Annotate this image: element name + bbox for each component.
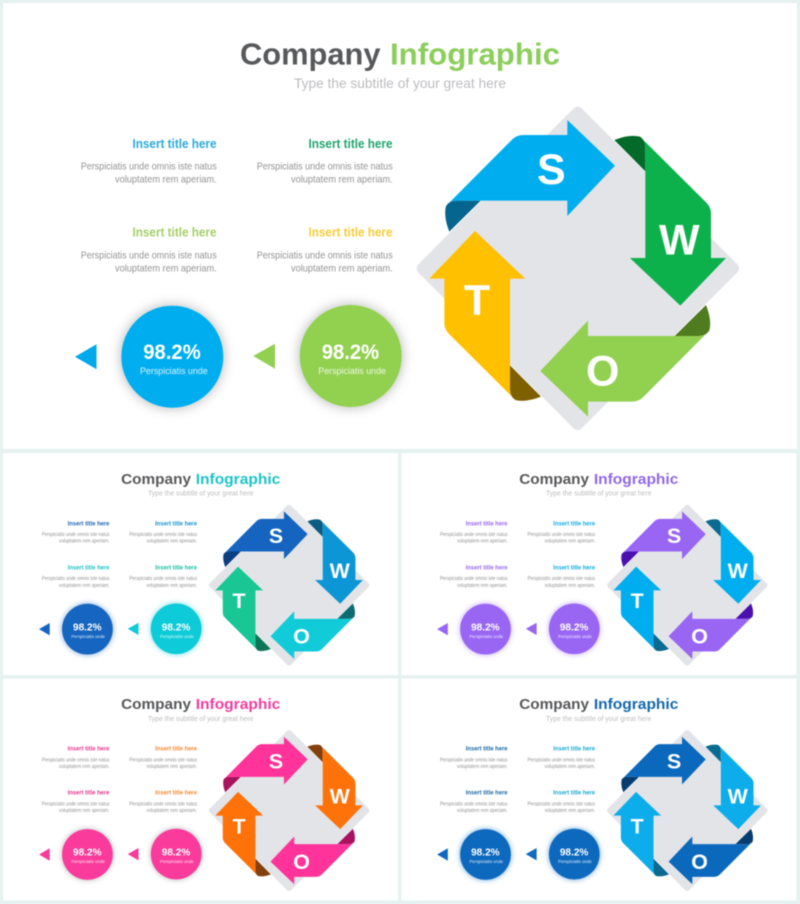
text block: O: Insert title here bbox=[466, 564, 508, 571]
arrow S: S bbox=[269, 524, 283, 548]
icon: left triangle bbox=[437, 848, 448, 861]
text block: O bbox=[81, 226, 217, 274]
text block: T: voluptatem rem aperiam. bbox=[146, 583, 197, 589]
arrow W: W bbox=[728, 785, 749, 809]
text block: O: voluptatem rem aperiam. bbox=[115, 262, 217, 274]
text block: O: Perspiciatis unde omnis iste natus bbox=[81, 249, 217, 261]
text block: S: voluptatem rem aperiam. bbox=[457, 538, 508, 544]
text block: W: Insert title here bbox=[308, 137, 393, 151]
text block: S bbox=[81, 137, 217, 186]
title: Infographic bbox=[390, 38, 560, 72]
stat circle: Perspiciatis unde bbox=[160, 634, 194, 640]
subtitle: Type the subtitle of your great here bbox=[294, 75, 506, 91]
text block: O: Insert title here bbox=[68, 564, 110, 571]
title: Company bbox=[519, 696, 590, 713]
text block: O: voluptatem rem aperiam. bbox=[457, 808, 508, 814]
arrow S: S bbox=[667, 524, 681, 548]
stat circle: 98.2% bbox=[162, 848, 190, 859]
arrow T: T bbox=[631, 589, 644, 613]
text block: W: Insert title here bbox=[553, 746, 596, 753]
text block: W: Perspiciatis unde omnis iste natus bbox=[129, 532, 197, 538]
stat circle bbox=[460, 604, 511, 655]
icon: left triangle bbox=[39, 623, 50, 635]
subtitle: Type the subtitle of your great here bbox=[546, 716, 652, 723]
arrow W bbox=[307, 519, 363, 604]
text block: O bbox=[440, 564, 508, 589]
panel: navy sky variant bbox=[401, 678, 796, 900]
icon: left triangle blue bbox=[75, 344, 96, 369]
text block: O bbox=[42, 790, 110, 814]
text block: T: Perspiciatis unde omnis iste natus bbox=[528, 802, 595, 808]
text block: S: Insert title here bbox=[68, 746, 110, 753]
subtitle: Type the subtitle of your great here bbox=[546, 490, 652, 497]
arrow S: S bbox=[667, 750, 681, 774]
arrow O bbox=[669, 603, 753, 659]
arrow O bbox=[271, 603, 355, 659]
stat circle green: Perspiciatis unde bbox=[318, 366, 386, 377]
stat circle: Perspiciatis unde bbox=[558, 634, 592, 640]
stat circle blue: 98.2% bbox=[143, 341, 201, 364]
arrow O: O bbox=[293, 850, 310, 874]
arrow T bbox=[613, 567, 669, 651]
stat circle blue: Perspiciatis unde bbox=[140, 366, 208, 377]
text block: O: Perspiciatis unde omnis iste natus bbox=[42, 802, 110, 808]
arrow W: W bbox=[330, 559, 351, 583]
text block: W: voluptatem rem aperiam. bbox=[146, 538, 197, 544]
text block: O: Perspiciatis unde omnis iste natus bbox=[42, 576, 110, 582]
text block: T: Perspiciatis unde omnis iste natus bbox=[528, 576, 595, 582]
title: Company bbox=[121, 471, 192, 488]
stat circle bbox=[549, 603, 600, 654]
text block: S: Perspiciatis unde omnis iste natus bbox=[81, 160, 217, 172]
subtitle: Type the subtitle of your great here bbox=[148, 490, 254, 497]
arrow S bbox=[621, 737, 706, 792]
text block: S bbox=[42, 520, 110, 544]
stat circle blue bbox=[121, 306, 223, 408]
arrow T bbox=[215, 792, 271, 876]
text block: T: voluptatem rem aperiam. bbox=[291, 262, 393, 274]
stat circle bbox=[151, 829, 202, 879]
arrow O bbox=[540, 305, 710, 417]
stat circle: 98.2% bbox=[471, 848, 500, 859]
title bbox=[240, 38, 560, 72]
text block: T: Insert title here bbox=[553, 790, 596, 797]
text block: O bbox=[42, 564, 110, 589]
panel: main SWOT infographic bbox=[3, 3, 797, 449]
text block: T: voluptatem rem aperiam. bbox=[545, 583, 595, 589]
panel: pink orange variant bbox=[3, 678, 398, 900]
icon: left triangle bbox=[128, 848, 139, 860]
text block: W: Perspiciatis unde omnis iste natus bbox=[129, 757, 197, 763]
arrow O: O bbox=[293, 625, 310, 649]
arrow W bbox=[705, 519, 761, 604]
stat circle: Perspiciatis unde bbox=[469, 634, 503, 640]
text block: W bbox=[528, 520, 596, 544]
text block: S: Perspiciatis unde omnis iste natus bbox=[440, 757, 508, 763]
title: Company bbox=[121, 696, 192, 713]
text block: T bbox=[129, 564, 197, 589]
arrow W: W bbox=[659, 216, 700, 264]
text block: S: Perspiciatis unde omnis iste natus bbox=[42, 757, 110, 763]
arrow W bbox=[705, 745, 761, 829]
arrow T: T bbox=[631, 814, 644, 838]
title bbox=[519, 696, 678, 713]
SWOT arrow diagram bbox=[422, 112, 733, 424]
text block: T: voluptatem rem aperiam. bbox=[146, 808, 197, 814]
text block: T: Perspiciatis unde omnis iste natus bbox=[129, 576, 197, 582]
stat circle: 98.2% bbox=[471, 622, 500, 633]
stat circle bbox=[62, 604, 113, 655]
text block: O: voluptatem rem aperiam. bbox=[59, 583, 110, 589]
text block: W bbox=[129, 520, 197, 544]
title: Infographic bbox=[594, 471, 678, 488]
icon: left triangle bbox=[526, 848, 537, 860]
stat circle: Perspiciatis unde bbox=[160, 859, 194, 865]
stat circle green: 98.2% bbox=[322, 341, 379, 364]
title: Infographic bbox=[196, 471, 280, 488]
stat circle: Perspiciatis unde bbox=[71, 634, 105, 640]
text block: S: voluptatem rem aperiam. bbox=[59, 764, 110, 770]
panel: teal blue variant bbox=[3, 453, 398, 675]
arrow S bbox=[223, 511, 308, 567]
stat circle: Perspiciatis unde bbox=[469, 859, 503, 865]
text block: W bbox=[129, 746, 197, 770]
stat circle: Perspiciatis unde bbox=[71, 859, 105, 865]
text block: S bbox=[440, 520, 508, 544]
arrow T bbox=[613, 792, 669, 876]
SWOT arrow diagram bbox=[212, 733, 367, 888]
panel: purple variant bbox=[401, 453, 796, 675]
text block: O: Insert title here bbox=[132, 226, 217, 240]
title: Company bbox=[240, 38, 381, 72]
stat circle: 98.2% bbox=[162, 622, 190, 633]
text block: W: voluptatem rem aperiam. bbox=[545, 764, 595, 770]
text block: S: voluptatem rem aperiam. bbox=[115, 174, 217, 186]
arrow O: O bbox=[691, 850, 708, 874]
arrow W: W bbox=[728, 559, 749, 583]
text block: S bbox=[42, 746, 110, 770]
stat circle: 98.2% bbox=[73, 622, 102, 633]
arrow O bbox=[271, 829, 355, 884]
arrow O: O bbox=[586, 348, 619, 396]
arrow S: S bbox=[269, 750, 283, 774]
arrow S bbox=[621, 511, 706, 567]
text block: T bbox=[528, 790, 596, 814]
text block: S: Insert title here bbox=[466, 746, 508, 753]
text block: T: Insert title here bbox=[553, 564, 596, 571]
icon: left triangle bbox=[39, 848, 50, 861]
icon: left triangle bbox=[526, 623, 537, 635]
icon: left triangle green bbox=[253, 344, 275, 369]
text block: T: Insert title here bbox=[155, 564, 197, 571]
title bbox=[121, 471, 280, 488]
text block: W bbox=[528, 746, 596, 770]
text block: S: Perspiciatis unde omnis iste natus bbox=[42, 532, 110, 538]
title: Company bbox=[519, 471, 590, 488]
arrow S bbox=[223, 737, 308, 792]
text block: W: Perspiciatis unde omnis iste natus bbox=[528, 532, 595, 538]
arrow T: T bbox=[464, 276, 490, 324]
text block: S bbox=[440, 746, 508, 770]
text block: W: Insert title here bbox=[155, 520, 197, 527]
text block: T: Perspiciatis unde omnis iste natus bbox=[257, 249, 393, 261]
arrow O bbox=[669, 829, 753, 884]
text block: T: voluptatem rem aperiam. bbox=[545, 808, 595, 814]
arrow T bbox=[215, 567, 271, 651]
title bbox=[519, 471, 678, 488]
stat circle bbox=[460, 829, 511, 880]
text block: S: Perspiciatis unde omnis iste natus bbox=[440, 532, 508, 538]
text block: W: Perspiciatis unde omnis iste natus bbox=[257, 160, 393, 172]
arrow W: W bbox=[330, 785, 351, 809]
stat circle bbox=[151, 603, 202, 654]
arrow O: O bbox=[691, 625, 708, 649]
arrow S: S bbox=[537, 146, 566, 194]
text block: T: Insert title here bbox=[155, 790, 197, 797]
text block: T bbox=[528, 564, 596, 589]
stat circle: 98.2% bbox=[560, 622, 588, 633]
stat circle bbox=[549, 829, 600, 879]
text block: O: Insert title here bbox=[466, 790, 508, 797]
text block: T bbox=[257, 226, 393, 274]
stat circle bbox=[62, 829, 113, 880]
title: Infographic bbox=[594, 696, 678, 713]
icon: left triangle bbox=[437, 623, 448, 635]
text block: S: Insert title here bbox=[466, 520, 508, 527]
text block: T bbox=[129, 790, 197, 814]
text block: W: Perspiciatis unde omnis iste natus bbox=[528, 757, 595, 763]
icon: left triangle bbox=[128, 623, 139, 635]
text block: W: voluptatem rem aperiam. bbox=[545, 538, 595, 544]
text block: O: voluptatem rem aperiam. bbox=[59, 808, 110, 814]
text block: W: Insert title here bbox=[553, 520, 596, 527]
text block: O: voluptatem rem aperiam. bbox=[457, 583, 508, 589]
stat circle: 98.2% bbox=[560, 848, 588, 859]
stat circle green bbox=[300, 305, 402, 407]
text block: O bbox=[440, 790, 508, 814]
text block: W: voluptatem rem aperiam. bbox=[146, 764, 197, 770]
arrow T bbox=[429, 231, 541, 401]
text block: O: Perspiciatis unde omnis iste natus bbox=[440, 576, 508, 582]
arrow S bbox=[445, 120, 615, 232]
arrow T: T bbox=[232, 589, 246, 613]
text block: T: Insert title here bbox=[308, 226, 393, 240]
arrow W bbox=[614, 136, 726, 306]
SWOT arrow diagram bbox=[212, 508, 367, 663]
SWOT arrow diagram bbox=[610, 508, 765, 663]
subtitle: Type the subtitle of your great here bbox=[148, 716, 254, 723]
text block: W: voluptatem rem aperiam. bbox=[291, 174, 393, 186]
title bbox=[121, 696, 280, 713]
text block: W bbox=[257, 137, 393, 186]
text block: S: voluptatem rem aperiam. bbox=[59, 538, 110, 544]
text block: S: voluptatem rem aperiam. bbox=[457, 764, 508, 770]
stat circle: 98.2% bbox=[73, 848, 102, 859]
stat circle: Perspiciatis unde bbox=[558, 859, 592, 865]
text block: S: Insert title here bbox=[68, 520, 110, 527]
arrow W bbox=[307, 745, 363, 829]
SWOT arrow diagram bbox=[610, 733, 765, 888]
text block: T: Perspiciatis unde omnis iste natus bbox=[129, 802, 197, 808]
text block: O: Perspiciatis unde omnis iste natus bbox=[440, 802, 508, 808]
title: Infographic bbox=[196, 696, 280, 713]
text block: W: Insert title here bbox=[155, 746, 197, 753]
arrow T: T bbox=[232, 814, 246, 838]
text block: S: Insert title here bbox=[132, 137, 217, 151]
text block: O: Insert title here bbox=[68, 790, 110, 797]
